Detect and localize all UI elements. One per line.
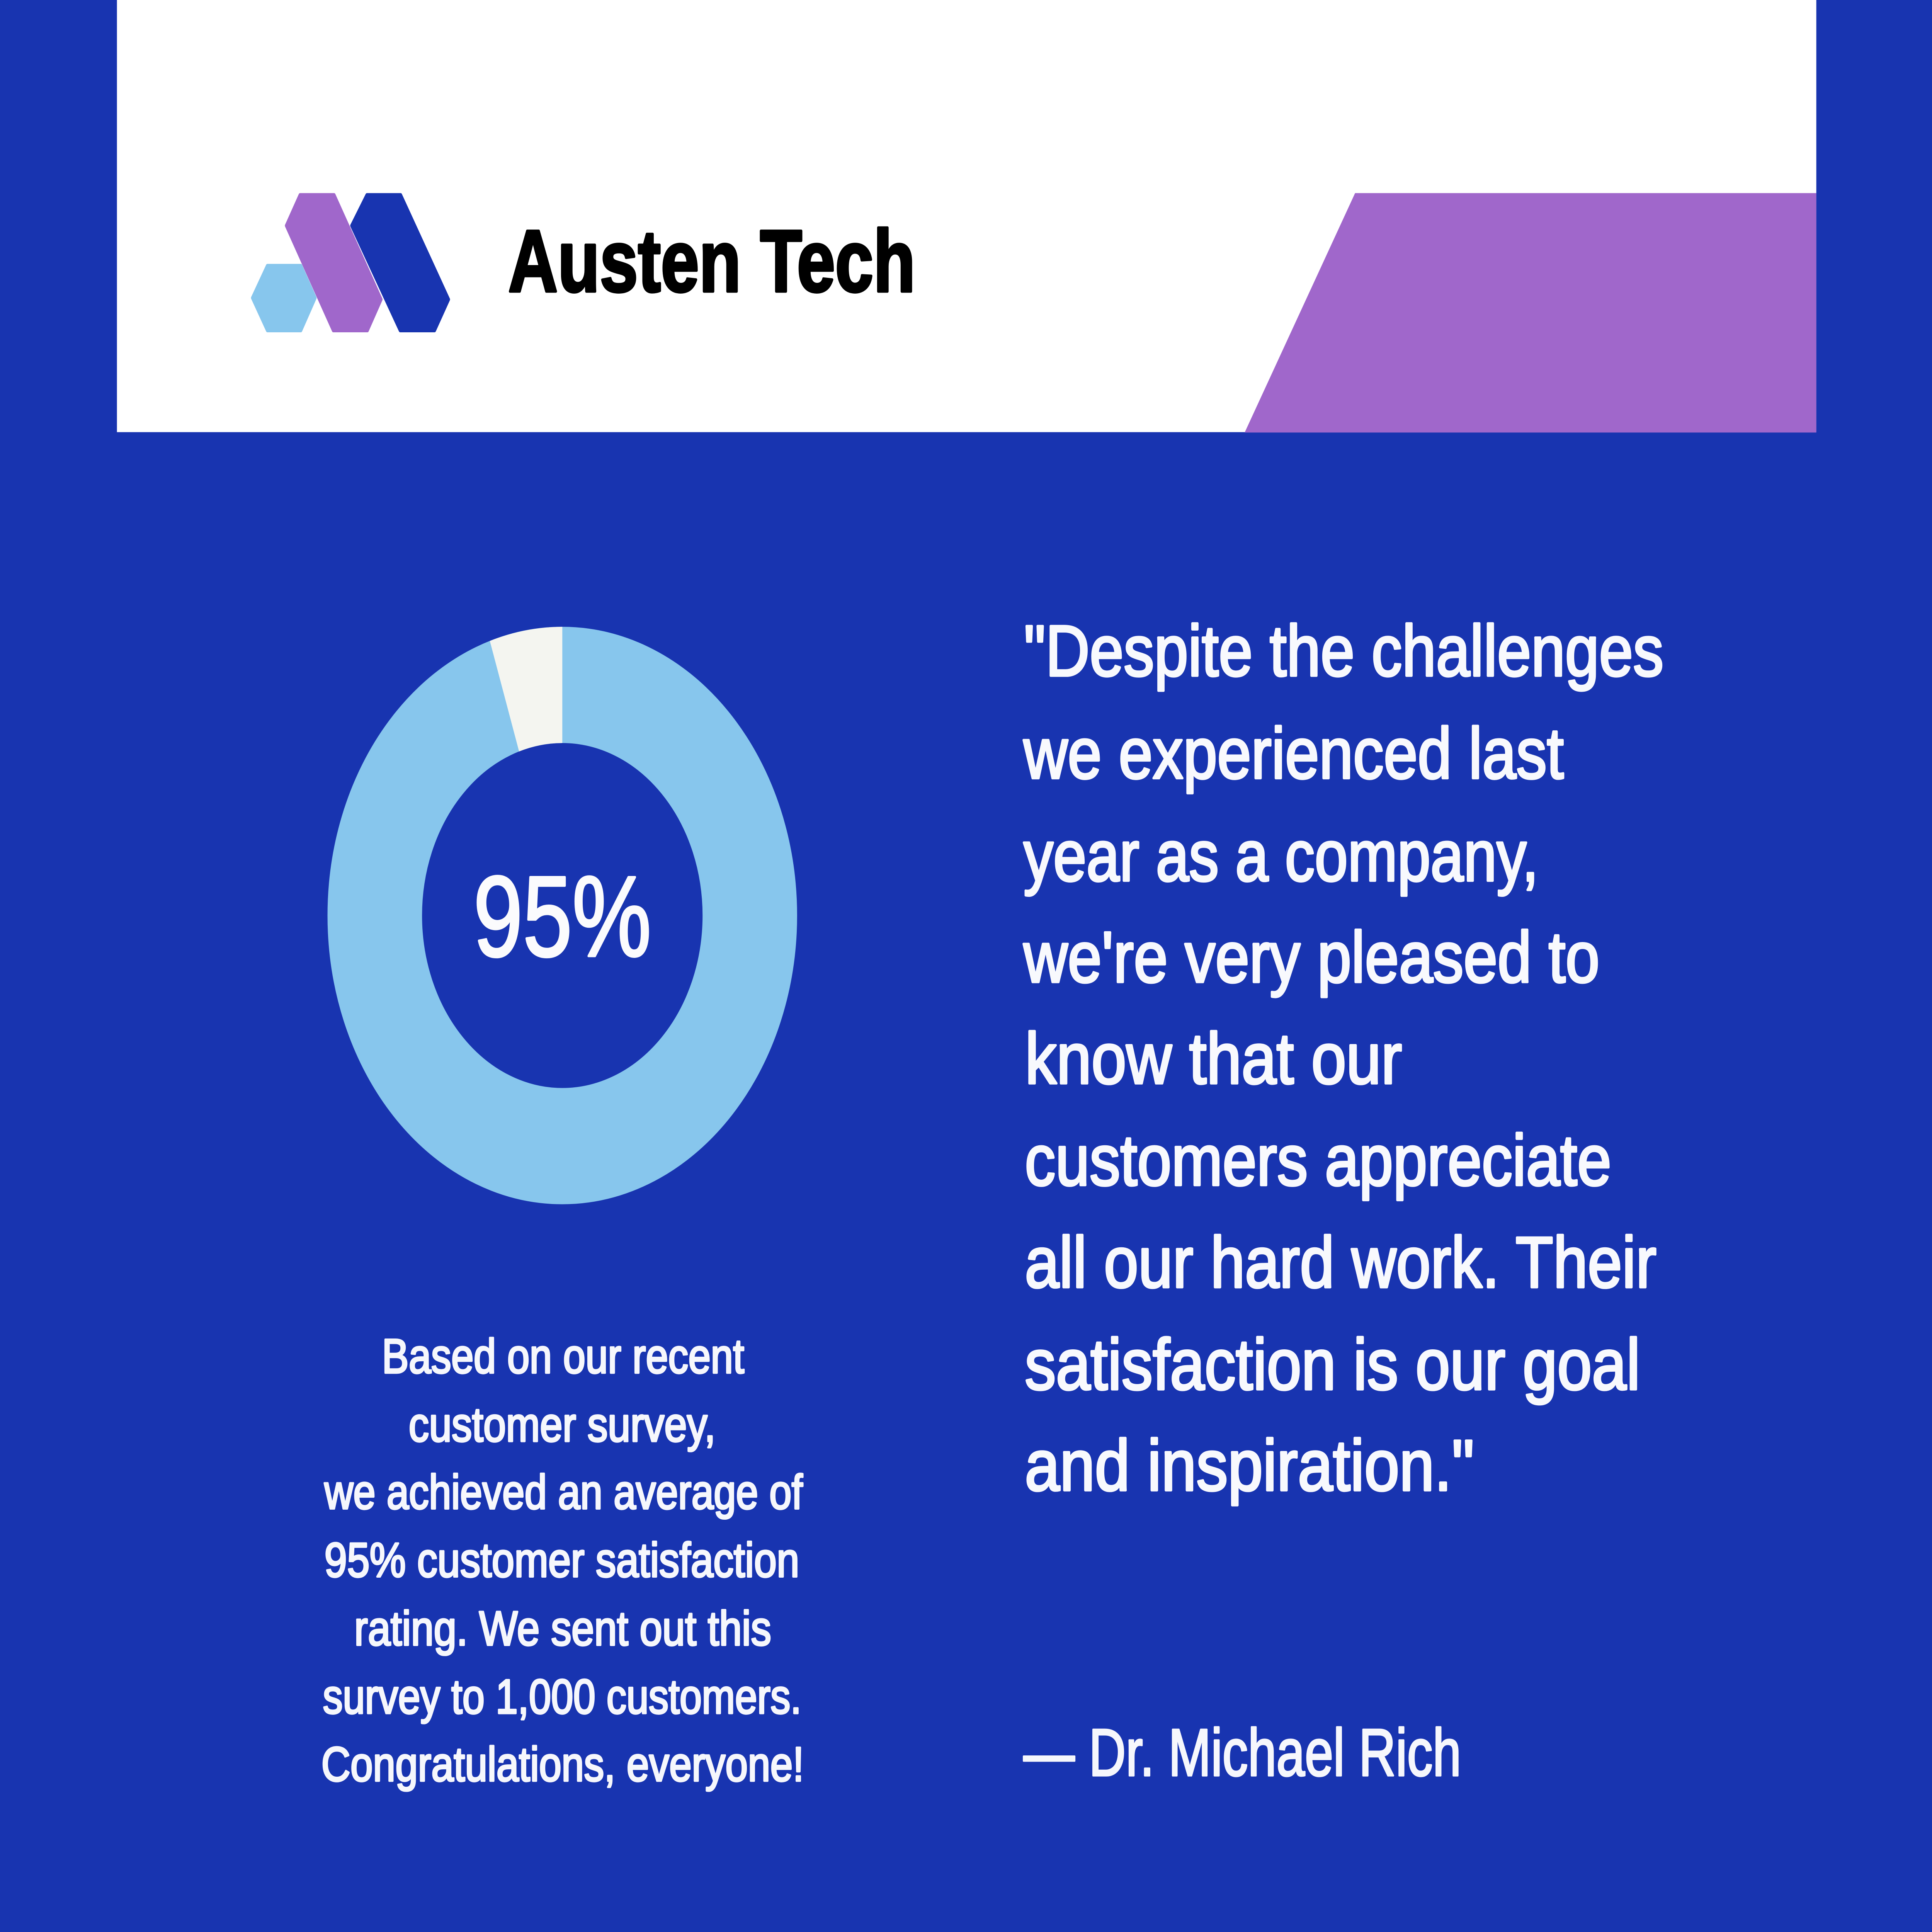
logo: purple bar (286, 195, 381, 330)
company name: Austen Tech (508, 212, 915, 310)
logo: blue bar (352, 195, 449, 330)
header purple accent shape (1245, 193, 1816, 432)
logo: light blue hexagon (253, 266, 315, 330)
survey description: Congratulations, everyone! (321, 1737, 804, 1791)
quote (1023, 611, 1663, 1506)
quote attribution: — Dr. Michael Rich (1024, 1716, 1461, 1790)
survey description (321, 1329, 804, 1791)
donut value: 95% (473, 852, 651, 981)
quote: customers appreciate (1025, 1120, 1611, 1201)
survey description: survey to 1,000 customers. (323, 1669, 801, 1724)
donut: 5% remainder segment (490, 627, 562, 752)
panel: header (117, 0, 1816, 432)
quote: year as a company, (1024, 816, 1539, 896)
donut: 95% segment (375, 685, 750, 1146)
logo (253, 195, 449, 330)
quote: all our hard work. Their (1025, 1222, 1656, 1303)
quote: we're very pleased to (1023, 917, 1600, 998)
survey description: we achieved an average of (324, 1465, 803, 1519)
survey description: customer survey, (409, 1397, 716, 1452)
quote: know that our (1025, 1019, 1402, 1099)
quote: "Despite the challenges (1024, 611, 1663, 691)
quote: satisfaction is our goal (1025, 1324, 1640, 1405)
donut chart (375, 627, 750, 1146)
quote: and inspiration." (1025, 1425, 1474, 1506)
survey description: rating. We sent out this (354, 1601, 771, 1655)
survey description: Based on our recent (382, 1329, 744, 1383)
quote: we experienced last (1023, 713, 1564, 794)
header white band (117, 0, 1816, 432)
survey description: 95% customer satisfaction (325, 1533, 799, 1587)
